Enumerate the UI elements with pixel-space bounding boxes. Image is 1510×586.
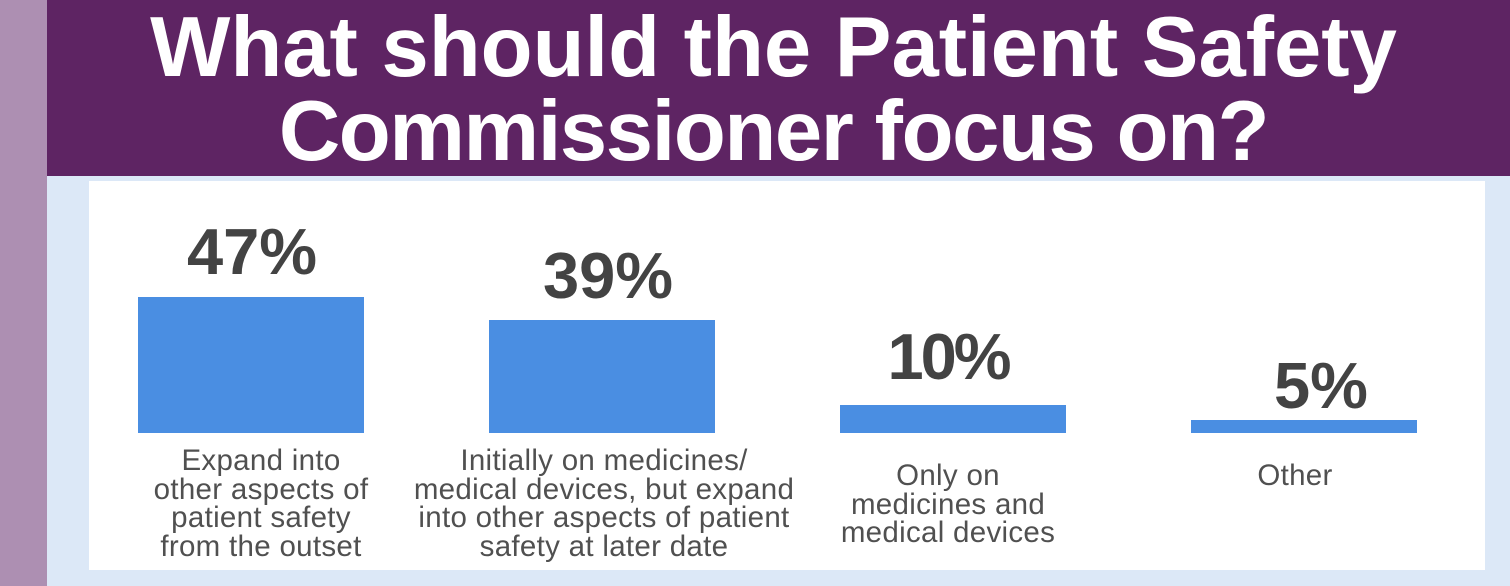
label 5%: Other	[1257, 459, 1333, 492]
label 47%	[154, 444, 368, 562]
title banner	[47, 0, 1510, 176]
label 39%: safety at later date	[480, 530, 728, 562]
column: 10%	[840, 320, 1066, 549]
label 47%: from the outset	[160, 530, 362, 562]
value 47%: 47%	[187, 215, 317, 288]
label 39%: medical devices, but expand	[414, 472, 794, 506]
column: 39%	[414, 239, 794, 562]
value 10%: 10%	[887, 320, 1009, 393]
label 10%: Only on	[896, 459, 1000, 492]
label 47%: patient safety	[171, 501, 351, 534]
panel: chart	[89, 181, 1485, 570]
bar 5%	[1191, 420, 1417, 433]
column: 5%	[1191, 349, 1417, 492]
bar 10%	[840, 405, 1066, 433]
bar 47%	[138, 297, 364, 433]
title: Commissioner focus on?	[279, 84, 1268, 179]
label 47%: other aspects of	[154, 472, 368, 506]
label 10%	[841, 459, 1055, 549]
label 47%: Expand into	[181, 444, 341, 477]
label 10%: medical devices	[841, 516, 1055, 549]
title	[150, 0, 1397, 179]
left sidebar	[0, 0, 47, 586]
label 10%: medicines and	[851, 488, 1045, 520]
bar 39%	[489, 320, 715, 433]
value 39%: 39%	[543, 239, 673, 312]
column: 47%	[138, 215, 368, 562]
title: What should the Patient Safety	[150, 0, 1397, 95]
value 5%: 5%	[1274, 349, 1368, 422]
label 39%	[414, 444, 794, 562]
label 39%: into other aspects of patient	[418, 501, 790, 534]
label 39%: Initially on medicines/	[460, 444, 748, 477]
